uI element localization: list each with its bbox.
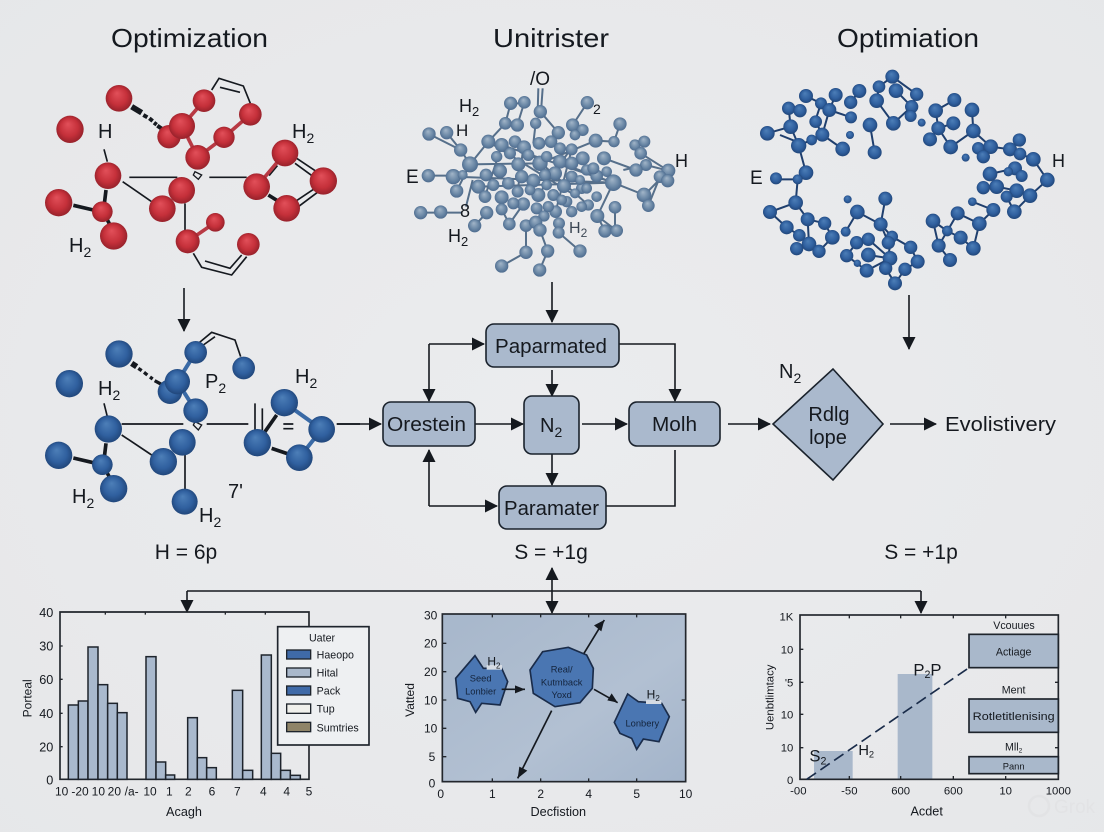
bar chart: 40	[39, 606, 53, 620]
molecule: grey-blue dense cluster: /O	[530, 69, 550, 90]
bar chart: 10	[143, 785, 157, 799]
bar chart: Porteal	[20, 679, 34, 717]
line and bar chart: S	[809, 747, 820, 766]
line and bar chart: Mll	[1005, 741, 1019, 753]
molecule: red ball and stick: H	[69, 235, 83, 257]
molecule: blue ball and stick: 2	[86, 495, 94, 511]
molecule: grey-blue dense cluster: 8	[460, 201, 470, 221]
bar chart: 4	[283, 785, 290, 799]
molecule: grey-blue dense cluster: 2	[593, 101, 601, 117]
line and bar chart: 2	[820, 755, 826, 767]
diagram chart: 5	[633, 787, 640, 801]
diagram chart: 5	[429, 750, 436, 764]
molecule: blue ball and stick: 7'	[228, 481, 243, 503]
bar chart: 6	[209, 785, 216, 799]
flowchart: N	[540, 415, 554, 437]
diagram chart: Yoxd	[551, 690, 572, 700]
diagram chart: 0	[429, 777, 436, 791]
line and bar chart: 600	[891, 785, 910, 797]
molecule: grey-blue dense cluster	[406, 69, 688, 277]
line and bar chart: 10	[781, 709, 793, 721]
chart legend	[278, 627, 369, 745]
line and bar chart: -00	[790, 785, 807, 797]
title: middle column: Unitrister	[493, 23, 609, 53]
line and bar chart: -50	[841, 785, 858, 797]
line and bar chart: Pann	[1003, 761, 1025, 771]
diagram chart: Real/	[551, 664, 573, 674]
title: right column: Optimiation	[837, 23, 979, 53]
molecule: red ball and stick: H	[98, 121, 112, 143]
diagram chart: 1	[489, 787, 496, 801]
diagram chart: 2	[655, 694, 660, 703]
molecule: blue ball and stick: 2	[218, 380, 226, 396]
bar chart: 2	[185, 785, 192, 799]
molecule: blue ring	[750, 70, 1065, 290]
chart legend: Uater	[309, 632, 336, 644]
flowchart	[337, 324, 936, 529]
molecule: blue ball and stick: 2	[213, 514, 221, 530]
bar chart: 30	[39, 640, 53, 654]
bar chart: 20	[39, 740, 53, 754]
arrow: red molecule to blue molecule	[183, 288, 185, 331]
molecule: blue ball and stick: H	[295, 366, 309, 388]
molecule: grey-blue dense cluster: 2	[461, 234, 468, 249]
molecule: red ball and stick: H	[292, 121, 306, 143]
diagram chart: H	[487, 655, 496, 669]
diagram chart: Decfistion	[531, 805, 586, 819]
connector linking the charts	[187, 568, 921, 613]
flowchart: Orestein	[387, 414, 466, 436]
decision diamond: lope	[809, 427, 847, 449]
arrow: cluster to flowchart	[551, 282, 553, 322]
line and bar chart: 2	[924, 669, 930, 681]
molecule: grey-blue dense cluster: H	[456, 121, 468, 140]
diagram chart: 2	[537, 787, 544, 801]
molecule: blue ball and stick: H	[199, 505, 213, 527]
diagram chart: 2	[496, 661, 501, 670]
equation: S = +1p: S = +1p	[884, 541, 958, 564]
label: N2 over diamond: N	[779, 361, 793, 383]
molecule: red ball and stick	[45, 78, 337, 275]
diagram chart: Kutmback	[541, 677, 583, 687]
diagram chart: 4	[585, 787, 592, 801]
line and bar chart: 0	[787, 775, 793, 787]
chart legend: Haeopo	[317, 649, 354, 661]
diagram chart: Lonbier	[465, 686, 496, 696]
molecule: grey-blue dense cluster: H	[569, 220, 581, 237]
bar chart: -20	[71, 785, 89, 799]
chart legend: Pack	[317, 685, 341, 697]
bar chart	[20, 606, 369, 819]
label: N2 over diamond: 2	[793, 370, 801, 386]
bar chart: 0	[46, 774, 53, 788]
watermark	[1029, 796, 1096, 818]
line and bar chart: Rotletitlenising	[973, 711, 1055, 723]
bar chart: 60	[39, 673, 53, 687]
flowchart: Molh	[652, 414, 697, 436]
diagram chart: Vatted	[403, 683, 417, 717]
molecule: grey-blue dense cluster: 2	[581, 226, 588, 240]
bar chart: 5	[306, 785, 313, 799]
molecule: blue ball and stick	[45, 332, 360, 530]
molecule: red ball and stick: 2	[306, 130, 314, 146]
molecule: blue ring: E	[750, 168, 763, 189]
chart legend: Sumtries	[317, 722, 359, 734]
molecule: red ball and stick: 2	[83, 244, 91, 260]
flowchart: Paramater	[504, 498, 599, 520]
diagram chart: 10	[424, 693, 438, 707]
line and bar chart	[764, 612, 1071, 818]
title: left column: Optimization	[111, 23, 268, 53]
line and bar chart: '5	[785, 677, 793, 689]
molecule: blue ball and stick: H	[98, 378, 112, 400]
bar chart: 20	[108, 785, 121, 799]
bar chart: 10	[92, 785, 105, 799]
bar chart: 7	[234, 785, 241, 799]
line and bar chart: 1K	[779, 612, 794, 624]
bar chart: Acagh	[166, 805, 202, 819]
molecule: grey-blue dense cluster: 2	[472, 104, 479, 119]
bar chart: 4	[260, 785, 267, 799]
molecule: blue ball and stick: H	[72, 486, 86, 508]
chart legend: Hital	[317, 667, 338, 679]
molecule: blue ball and stick: P	[205, 371, 218, 393]
line and bar chart: Uenbtlimtacy	[764, 664, 776, 730]
arrow: ring to decision	[908, 295, 910, 349]
molecule: blue ring: H	[1052, 151, 1065, 171]
line and bar chart: 10	[999, 785, 1012, 797]
line and bar chart: Ment	[1002, 684, 1026, 696]
equation: H = 6p: H = 6p	[155, 541, 217, 564]
bar chart: 1	[166, 785, 173, 799]
flowchart: 2	[554, 424, 562, 440]
decision diamond	[773, 369, 883, 480]
chart legend: Tup	[317, 704, 335, 716]
line and bar chart: Actiage	[996, 646, 1032, 658]
diagram chart: 20	[424, 665, 438, 679]
flowchart: Paparmated	[495, 336, 607, 358]
line and bar chart: 10	[781, 644, 793, 656]
line and bar chart: 600	[944, 785, 963, 797]
diagram chart: 0	[437, 787, 444, 801]
watermark: Grok	[1054, 797, 1096, 818]
diagram chart: 10	[424, 722, 438, 736]
diagram chart: 10	[679, 787, 693, 801]
molecule: blue ball and stick: 2	[309, 375, 317, 391]
diagram chart: 20	[424, 637, 438, 651]
equation: S = +1g: S = +1g	[514, 541, 588, 564]
line and bar chart: P	[930, 660, 942, 679]
line and bar chart: 10	[781, 743, 793, 755]
molecule: blue ball and stick: 2	[112, 387, 120, 403]
diagram chart	[403, 608, 693, 819]
line and bar chart: 2	[1019, 747, 1023, 754]
decision diamond: Rdlg	[808, 404, 850, 426]
line and bar chart: 1000	[1046, 785, 1071, 797]
line and bar chart: Vcouues	[993, 620, 1035, 632]
label: evolistivery outcome: Evolistivery	[945, 414, 1056, 436]
diagram chart: Seed	[470, 673, 492, 683]
line and bar chart: P	[913, 660, 924, 679]
molecule: grey-blue dense cluster: E	[406, 167, 419, 188]
bar chart: 10	[55, 785, 69, 799]
line and bar chart: Acdet	[910, 804, 943, 818]
line and bar chart: 2	[869, 750, 874, 760]
molecule: grey-blue dense cluster: H	[448, 226, 461, 246]
diagram chart: Lonbery	[625, 718, 660, 728]
molecule: grey-blue dense cluster: H	[459, 96, 472, 116]
bar chart: 40	[39, 707, 53, 721]
molecule: grey-blue dense cluster: H	[675, 151, 688, 171]
diagram chart: H	[647, 687, 655, 701]
line and bar chart: H	[858, 743, 869, 759]
bar chart: /a-	[125, 785, 139, 799]
diagram chart: 30	[424, 608, 438, 622]
